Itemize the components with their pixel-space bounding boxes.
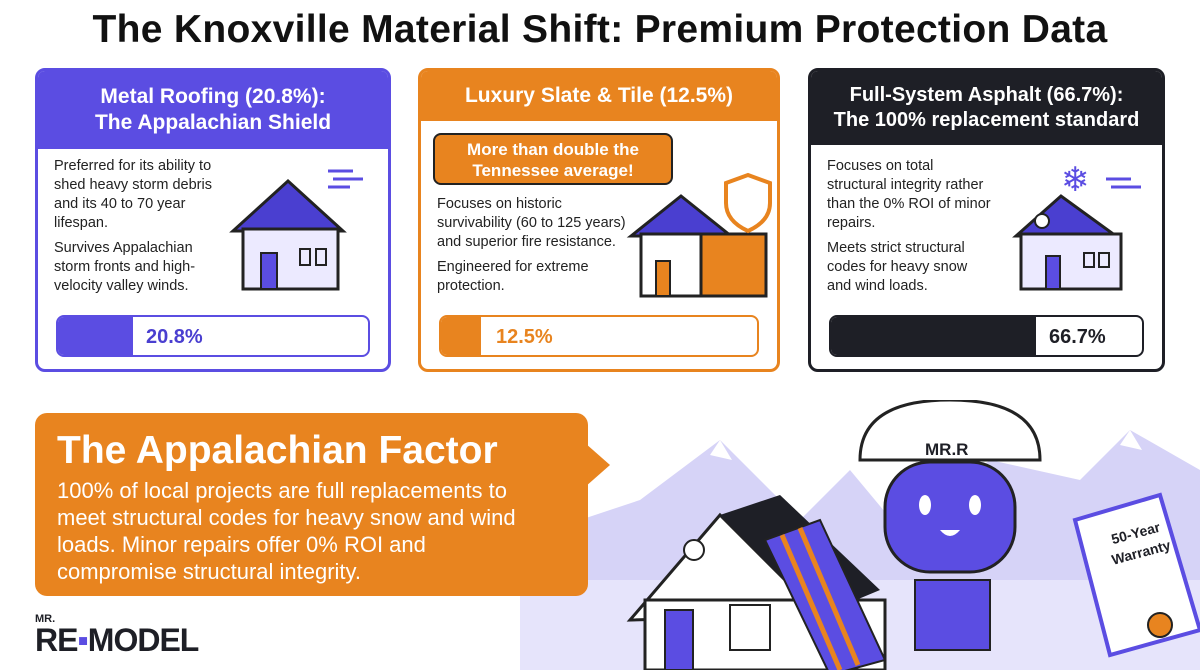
bar: 12.5%: 12.5%: [496, 326, 553, 348]
text: factor body: 100% of local projects are full replacements to: [57, 478, 507, 503]
header: asphalt: Full-System Asphalt (66.7%):: [850, 84, 1123, 106]
text: slate: Focuses on historic: [437, 196, 562, 212]
header: slate: [421, 71, 777, 121]
text: asphalt: codes for heavy snow: [827, 259, 967, 275]
text: slate: survivability (60 to 125 years): [437, 215, 626, 231]
text: slate: [437, 196, 626, 294]
text: metal: velocity valley winds.: [54, 278, 189, 294]
text: asphalt: than the 0% ROI of minor: [827, 196, 991, 212]
panel: asphalt: [808, 68, 1165, 372]
scene: mountains, house, robot: Warranty: [1110, 537, 1172, 568]
callout: Appalachian Factor: [35, 413, 588, 596]
bar: 66.7%: [829, 315, 1144, 357]
header: asphalt: [811, 71, 1162, 145]
text: asphalt: Meets strict structural: [827, 240, 965, 256]
text: factor body: [57, 478, 516, 584]
text: metal: shed heavy storm debris: [54, 177, 212, 193]
text: metal: lifespan.: [54, 215, 108, 231]
text: metal: and its 40 to 70 year: [54, 196, 185, 212]
text: metal: Preferred for its ability to: [54, 158, 211, 174]
callout: double: [433, 133, 673, 185]
logo: Mr. Remodel: RE▪MODEL: [35, 622, 198, 658]
text: asphalt: structural integrity rather: [827, 177, 983, 193]
icon: house purple: [229, 170, 363, 290]
bar: 20.8%: [56, 315, 370, 357]
text: asphalt: Focuses on total: [827, 158, 933, 174]
text: factor body: compromise structural integrity.: [57, 559, 361, 584]
icon: house snow: ❄: [1061, 161, 1090, 199]
text: factor body: meet structural codes for heavy snow and wind: [57, 505, 516, 530]
text: metal: Survives Appalachian: [54, 240, 193, 256]
text: metal: storm fronts and high-: [54, 259, 195, 275]
panel: metal roofing: [35, 68, 391, 372]
heading: Appalachian Factor: The Appalachian Factor: [57, 429, 498, 472]
text: slate: and superior fire resistance.: [437, 234, 616, 250]
text: metal: [54, 158, 212, 294]
text: asphalt: and wind loads.: [827, 278, 928, 294]
text: factor body: loads. Minor repairs offer 0% ROI and: [57, 532, 426, 557]
header: metal: Metal Roofing (20.8%):: [100, 85, 326, 108]
bar: 12.5%: [439, 315, 759, 357]
arrow pointer: [585, 443, 610, 487]
scene: mountains, house, robot: [520, 400, 1200, 670]
header: metal: [38, 71, 388, 149]
logo: Mr. Remodel: MR.: [35, 613, 55, 625]
text: slate: Engineered for extreme: [437, 259, 589, 275]
panel: slate & tile: [418, 68, 780, 372]
callout: double: More than double the Tennessee average!: [467, 140, 639, 180]
text: asphalt: repairs.: [827, 215, 875, 231]
header: slate: Luxury Slate & Tile (12.5%): [465, 84, 733, 107]
bar: 20.8%: 20.8%: [146, 326, 203, 348]
robot: [860, 400, 1040, 460]
text: asphalt: [827, 158, 991, 294]
icon: house orange with shield: [626, 172, 772, 298]
bar: 66.7%: 66.7%: [1049, 326, 1106, 348]
header: asphalt: The 100% replacement standard: [834, 109, 1139, 131]
header: metal: The Appalachian Shield: [95, 111, 331, 134]
icon: house snow: [1012, 161, 1141, 290]
scene: mountains, house, robot: 50-Year: [1110, 519, 1162, 547]
scene: mountains, house, robot: MR.R: [925, 440, 968, 459]
text: slate: protection.: [437, 278, 505, 294]
title: The Knoxville Material Shift: Premium Protection Data: [93, 8, 1107, 51]
